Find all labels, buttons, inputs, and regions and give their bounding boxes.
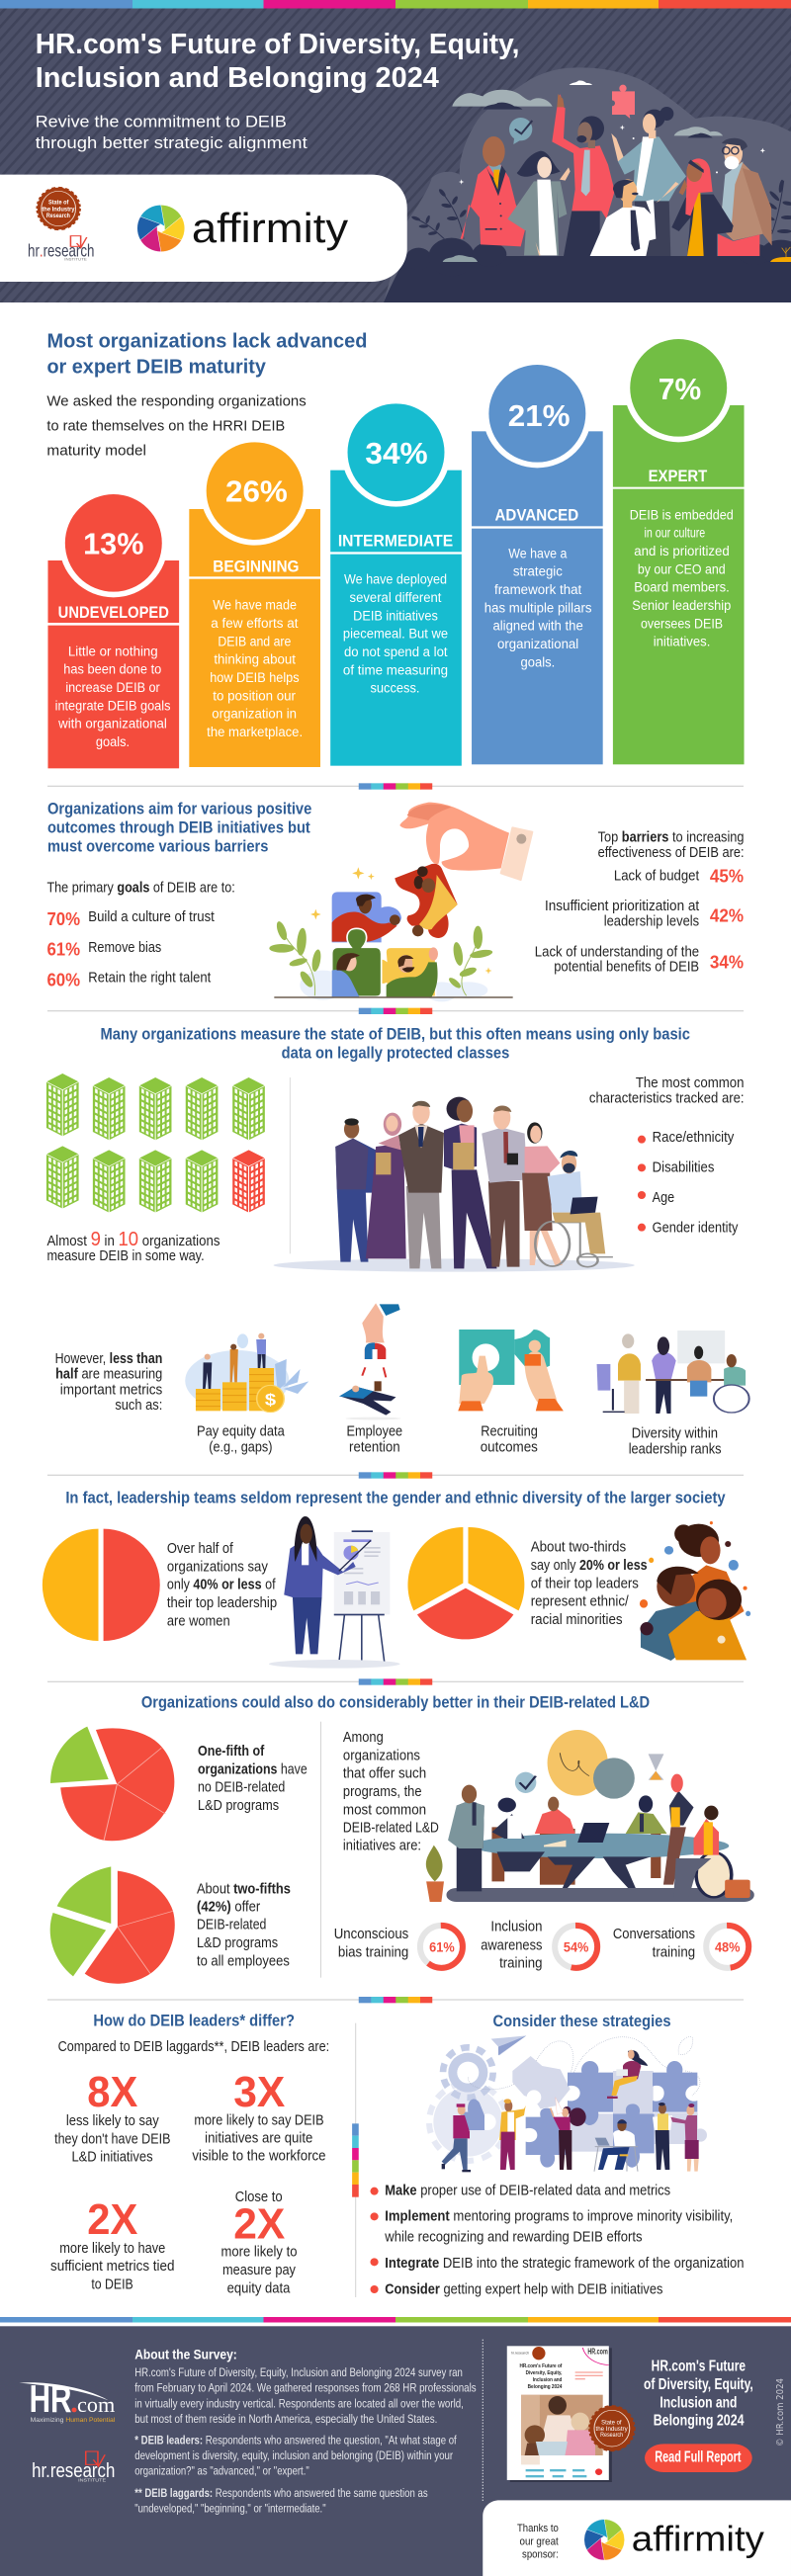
text: less than half: such as: — [115, 1397, 162, 1413]
column: advanced 21%: aligned with the — [492, 618, 583, 634]
text: among organizations: programs, the — [343, 1783, 422, 1799]
column: beginning 26%: thinking about — [214, 651, 296, 667]
stat: 3X: visible to the workforce — [192, 2148, 326, 2164]
text: one-fifth: L&D programs — [198, 1797, 279, 1813]
text: over half: organizations say — [167, 1559, 268, 1575]
text: about the survey: * DEIB leaders: Respondents who answered the question, "At what stage of — [134, 2434, 457, 2447]
stat: close to 2X pay equity: more likely to — [220, 2244, 298, 2260]
text: among organizations: Among — [343, 1729, 384, 1745]
stat: 8X — [54, 2068, 170, 2165]
subtitle: through better strategic alignment — [36, 133, 308, 152]
column: beginning 26%: to position our — [213, 688, 296, 703]
text: about two-thirds: represent ethnic/ — [531, 1593, 629, 1609]
donut chart: 61% unconscious bias training — [334, 1926, 463, 1968]
logo: HR.com: Maximizing Human Potential — [31, 2416, 115, 2424]
report cover: Belonging 2024 — [528, 2384, 562, 2390]
column: intermediate 34%: do not spend a lot — [344, 644, 448, 659]
stat: close to 2X pay equity: 2X — [233, 2199, 285, 2248]
text: over half: are women — [167, 1612, 230, 1628]
pie chart: women in top leadership — [43, 1529, 160, 1641]
text: among organizations: DEIB-related L&D — [343, 1819, 439, 1835]
label: diversity within leadership ranks — [629, 1425, 722, 1456]
report cover: HR.com's Future of — [520, 2363, 563, 2369]
intro text: We asked the responding organizations — [46, 393, 307, 409]
report cover: hr.research — [511, 2352, 529, 2356]
column: intermediate 34%: INTERMEDIATE — [338, 532, 453, 550]
icons: 9 in 10 buildings — [46, 1073, 265, 1213]
title: HR.com's Future of Diversity, Equity, — [36, 28, 520, 59]
text: two-fifths: (42%) offer — [197, 1899, 260, 1915]
panel: leaders and strategies — [47, 1997, 745, 2297]
column: intermediate 34% — [330, 398, 462, 766]
panel: sponsor — [483, 2500, 791, 2576]
stat: close to 2X pay equity — [220, 2189, 298, 2295]
stat: 2X metrics: 2X — [87, 2195, 137, 2243]
column: advanced 21% — [472, 359, 603, 764]
column: intermediate 34%: 34% — [365, 437, 428, 471]
panel: header — [0, 8, 791, 302]
logo: state of the industry research seal: the Industry — [42, 206, 75, 213]
list: primary goals: The primary goals of DEIB are to: — [46, 879, 235, 895]
column: expert 7%: in our culture — [645, 525, 705, 541]
text: about two-thirds — [531, 1539, 648, 1627]
text: about two-thirds: About two-thirds — [531, 1539, 626, 1555]
list: top barriers: leadership levels — [604, 913, 699, 929]
logo: state of the industry research seal: State of — [48, 199, 69, 206]
panel: sponsor: Thanks to — [517, 2523, 559, 2534]
column: beginning 26%: a few efforts at — [211, 616, 299, 631]
column: beginning 26%: BEGINNING — [213, 558, 300, 576]
logo: affirmity: affirmity — [192, 205, 349, 251]
illustration: woman presenting — [284, 1516, 390, 1663]
button: read full report — [645, 2444, 752, 2472]
text: one-fifth — [198, 1743, 308, 1813]
column: advanced 21%: We have a — [508, 546, 568, 560]
list: primary goals: Remove bias — [88, 939, 161, 955]
text: one-fifth: One-fifth of — [198, 1743, 265, 1759]
logo: hr.research: hr.research — [28, 240, 94, 260]
stat: close to 2X pay equity: equity data — [227, 2279, 291, 2295]
label: employee retention: Employee — [347, 1422, 402, 1438]
report cover: Diversity, Equity, — [526, 2370, 562, 2376]
stat: 2X metrics: sufficient metrics tied — [50, 2258, 175, 2274]
pie chart: two-fifths — [50, 1866, 175, 1984]
stat: close to 2X pay equity: Close to — [235, 2189, 283, 2204]
text: among organizations: initiatives are: — [343, 1838, 421, 1853]
report cover: HR.com — [587, 2348, 608, 2357]
report title — [644, 2359, 753, 2430]
intro text: to rate themselves on the HRRI DEIB — [46, 417, 285, 433]
column: intermediate 34%: piecemeal. But we — [343, 626, 448, 642]
column: beginning 26%: 26% — [225, 475, 288, 509]
column: undeveloped 13%: increase DEIB or — [65, 680, 160, 695]
text: about the survey: HR.com's Future of Diversity, Equity, Inclusion and Belonging 2024 survey ran — [134, 2366, 463, 2379]
column: beginning 26%: DEIB and are — [218, 634, 292, 648]
text: less than half: important metrics — [60, 1382, 162, 1398]
label: employee retention — [347, 1422, 402, 1454]
column: intermediate 34%: several different — [350, 590, 441, 605]
text: among organizations — [343, 1729, 439, 1853]
heading: how do DEIB leaders differ: How do DEIB leaders* differ? — [93, 2012, 295, 2029]
list: primary goals — [46, 879, 235, 990]
text: two-fifths — [197, 1880, 291, 1969]
panel: sponsor: our great — [520, 2535, 559, 2547]
heading: must overcome various barriers — [47, 837, 268, 855]
column: beginning 26%: We have made — [213, 597, 297, 613]
list: primary goals: 60% — [46, 970, 80, 990]
title: Inclusion and Belonging 2024 — [36, 61, 439, 93]
column: undeveloped 13%: 13% — [83, 528, 143, 561]
column: undeveloped 13% — [47, 488, 179, 768]
column: advanced 21%: organizational — [497, 637, 578, 651]
text: two-fifths: to all employees — [197, 1953, 290, 1969]
illustration: group of diverse people — [274, 1097, 635, 1272]
column: advanced 21%: ADVANCED — [495, 507, 578, 525]
stat: 8X: 8X — [87, 2068, 137, 2115]
list: top barriers: Insufficient prioritization at — [545, 898, 700, 913]
stat: 3X: initiatives are quite — [205, 2130, 312, 2146]
report cover: State of — [601, 2418, 622, 2426]
list: top barriers: Lack of budget — [614, 868, 700, 884]
text: two-fifths: About two-fifths — [197, 1880, 291, 1896]
text: one-fifth: no DEIB-related — [198, 1779, 285, 1795]
label: recruiting outcomes: outcomes — [481, 1438, 538, 1454]
column: beginning 26%: organization in — [212, 706, 297, 722]
heading: Organizations aim for various positive — [47, 800, 311, 817]
panel: logos — [0, 175, 407, 282]
stat: 8X: L&D initiatives — [71, 2149, 153, 2165]
label: diversity within leadership ranks: Diversity within — [632, 1425, 718, 1441]
text: about the survey: "undeveloped," "beginning," or "intermediate." — [134, 2503, 326, 2516]
panel: maturity section — [46, 329, 745, 768]
logo: hr.research institute: hr.research — [32, 2458, 115, 2482]
column: advanced 21%: goals. — [521, 654, 555, 669]
illustration: team around a table — [426, 1730, 754, 1902]
text: about the survey — [134, 2347, 477, 2516]
heading: data on legally protected classes — [282, 1044, 509, 1063]
stat text — [46, 1229, 220, 1263]
label: recruiting outcomes — [481, 1422, 538, 1454]
subtitle: Revive the commitment to DEIB — [36, 112, 287, 131]
report cover: the Industry — [596, 2425, 628, 2433]
donut chart: 48% conversations training: 48% — [715, 1939, 740, 1954]
subtitle — [36, 112, 308, 152]
stat: 3X: more likely to say DEIB — [194, 2111, 324, 2127]
donut chart: 54% inclusion awareness training: awareness — [481, 1936, 542, 1952]
report cover: Research — [600, 2431, 623, 2439]
text: about two-thirds: say only 20% or less — [531, 1557, 648, 1573]
donut chart: 48% conversations training: Conversations — [613, 1926, 695, 1941]
column: undeveloped 13%: has been done to — [63, 661, 161, 677]
text: among organizations: that offer such — [343, 1765, 426, 1781]
column: advanced 21%: framework that — [494, 582, 581, 597]
copyright: © HR.com 2024 — [775, 2378, 786, 2447]
stat: 2X metrics: more likely to have — [59, 2240, 165, 2256]
donut chart: 48% conversations training — [613, 1926, 748, 1968]
list: top barriers: 34% — [710, 952, 744, 973]
report cover: Inclusion and — [533, 2377, 562, 2383]
column: undeveloped 13%: Little or nothing — [68, 644, 158, 658]
text: about two-thirds: racial minorities — [531, 1611, 623, 1627]
logo: state of the industry research seal: Research — [46, 213, 70, 219]
column: expert 7% — [613, 333, 745, 764]
text: over half — [167, 1540, 277, 1628]
text: two-fifths: L&D programs — [197, 1934, 278, 1950]
panel: learning and development — [47, 1660, 754, 1984]
column: expert 7%: oversees DEIB — [641, 616, 723, 631]
logo: state of the industry research seal — [38, 188, 80, 229]
logo: hr.research — [28, 236, 94, 262]
panel: measuring DEIB — [46, 1008, 745, 1272]
text: about the survey: About the Survey: — [134, 2347, 237, 2362]
column: intermediate 34%: DEIB initiatives — [353, 608, 438, 623]
list: top barriers: 45% — [710, 866, 744, 887]
icon: pay equity data — [185, 1333, 308, 1413]
heading: Most organizations lack advanced — [46, 329, 367, 352]
text: over half: Over half of — [167, 1540, 233, 1556]
icon: pay equity data: $ — [265, 1391, 276, 1410]
donut chart: 61% unconscious bias training: bias training — [338, 1943, 408, 1959]
logo: affirmity — [131, 199, 349, 258]
column: expert 7%: EXPERT — [649, 468, 707, 485]
icon: recruiting outcomes puzzle — [458, 1330, 564, 1411]
intro text: Compared to DEIB laggards**, DEIB leaders are: — [58, 2038, 329, 2054]
text: less than half — [55, 1350, 162, 1413]
intro text: maturity model — [46, 442, 146, 458]
text: less than half: half are measuring — [55, 1366, 162, 1382]
bottom colour bar — [0, 2317, 791, 2323]
heading — [46, 329, 367, 378]
list: characteristics tracked: Race/ethnicity — [653, 1129, 735, 1145]
list: primary goals: Retain the right talent — [88, 970, 212, 986]
intro text — [46, 393, 307, 458]
label: diversity within leadership ranks: leadership ranks — [629, 1440, 722, 1456]
column: undeveloped 13%: with organizational — [57, 716, 167, 731]
list: primary goals: 61% — [46, 939, 80, 960]
list: strategies — [370, 2182, 745, 2296]
column: beginning 26%: how DEIB helps — [210, 670, 300, 685]
text: over half: only 40% or less of — [167, 1577, 276, 1592]
column: beginning 26%: the marketplace. — [207, 725, 303, 739]
text: one-fifth: organizations have — [198, 1760, 308, 1776]
donut chart: 54% inclusion awareness training: training — [499, 1955, 542, 1971]
text: two-fifths: DEIB-related — [197, 1917, 266, 1932]
donut chart: 54% inclusion awareness training: Inclusion — [490, 1919, 542, 1934]
stat: 8X: less likely to say — [66, 2112, 159, 2128]
text: about the survey: from February to April 2024. We gathered responses from 268 HR professionals — [134, 2382, 477, 2395]
column: advanced 21%: 21% — [508, 399, 571, 433]
column: expert 7%: 7% — [659, 373, 701, 406]
donut chart: 61% unconscious bias training: Unconscious — [334, 1926, 408, 1941]
list: top barriers: 42% — [710, 905, 744, 926]
donut chart: 61% unconscious bias training: 61% — [429, 1939, 455, 1954]
illustration: hand placing puzzle pieces — [269, 803, 532, 1001]
illustration: diverse team — [384, 67, 791, 302]
column: expert 7%: initiatives. — [654, 634, 710, 649]
panel: footer — [0, 2326, 791, 2576]
column: beginning 26% — [189, 437, 320, 767]
text: over half: their top leadership — [167, 1594, 277, 1610]
column: expert 7%: by our CEO and — [638, 561, 726, 576]
column: intermediate 34%: We have deployed — [344, 571, 447, 587]
label: pay equity data — [197, 1422, 285, 1454]
column: intermediate 34%: success. — [370, 680, 419, 696]
list: characteristics tracked — [589, 1074, 745, 1235]
stat text: measure DEIB in some way. — [46, 1247, 205, 1263]
stat: 3X — [192, 2068, 326, 2164]
label: recruiting outcomes: Recruiting — [481, 1422, 538, 1438]
text: about two-thirds: of their top leaders — [531, 1575, 639, 1590]
stat: 2X metrics: to DEIB — [91, 2275, 133, 2291]
heading: or expert DEIB maturity — [46, 355, 266, 378]
logo: HR.com: HR — [30, 2376, 71, 2421]
logo: HR.com: com — [77, 2393, 115, 2417]
logo: hr.research: INSTITUTE — [64, 258, 87, 262]
column: expert 7%: Senior leadership — [632, 598, 731, 613]
logo: hr.research institute: INSTITUTE — [78, 2479, 106, 2483]
title — [36, 28, 520, 93]
label: pay equity data: Pay equity data — [197, 1422, 285, 1438]
donut chart: 48% conversations training: training — [653, 1943, 695, 1959]
column: intermediate 34%: of time measuring — [343, 662, 448, 677]
heading: outcomes through DEIB initiatives but — [47, 818, 310, 836]
list: primary goals: Build a culture of trust — [88, 908, 215, 924]
column: advanced 21%: has multiple pillars — [484, 600, 592, 615]
icon: diversity within leadership — [597, 1331, 749, 1414]
stat: close to 2X pay equity: measure pay — [222, 2262, 296, 2277]
stat text: Almost 9 in 10 organizations — [46, 1229, 220, 1250]
column: undeveloped 13%: integrate DEIB goals — [55, 698, 171, 713]
text: about the survey: but most of them reside in North America, especially the United States. — [134, 2413, 437, 2426]
pie chart: ethnic and racial minorities — [407, 1527, 524, 1639]
list: characteristics tracked: Age — [653, 1189, 674, 1205]
logo: hr.research institute — [32, 2451, 115, 2483]
column: undeveloped 13%: goals. — [96, 734, 130, 749]
text: among organizations: most common — [343, 1801, 426, 1817]
panel: goals and barriers — [46, 783, 745, 1001]
donut chart: 54% inclusion awareness training — [481, 1919, 597, 1971]
text: about the survey: in virtually every industry vertical. Respondents are located all over the world, — [134, 2397, 464, 2410]
stat: 2X metrics — [50, 2195, 175, 2291]
heading — [47, 800, 311, 855]
text: about the survey: ** DEIB laggards: Respondents who answered the same question as — [134, 2487, 428, 2500]
list: top barriers — [535, 829, 745, 975]
panel: metrics and leadership diversity — [43, 1303, 750, 1663]
column: advanced 21%: strategic — [513, 563, 563, 579]
column: undeveloped 13%: UNDEVELOPED — [58, 604, 169, 622]
text: less than half: However, less than — [55, 1350, 162, 1366]
text: about the survey: organization?" as "advanced," or "expert." — [134, 2465, 309, 2478]
stat: 8X: they don't have DEIB — [54, 2130, 170, 2146]
panel: sponsor: sponsor: — [522, 2548, 559, 2561]
text: about the survey: development is diversity, equity, inclusion and belonging (DEIB) within your — [134, 2449, 453, 2462]
illustration: faces of diverse women and men — [640, 1521, 750, 1661]
report cover — [507, 2346, 634, 2482]
column: expert 7%: and is prioritized — [634, 544, 730, 558]
top colour bar — [0, 0, 791, 8]
donut chart: 54% inclusion awareness training: 54% — [564, 1939, 588, 1954]
stat: 3X: 3X — [233, 2068, 285, 2115]
illustration: people building puzzle and gears — [429, 2035, 707, 2172]
pie chart: one-fifth — [50, 1727, 174, 1841]
icon: employee retention magnet — [339, 1303, 401, 1419]
text: among organizations: organizations — [343, 1747, 420, 1762]
list: primary goals: 70% — [46, 909, 80, 930]
label: pay equity data: (e.g., gaps) — [209, 1438, 273, 1454]
list: characteristics tracked: Disabilities — [653, 1159, 714, 1175]
label: employee retention: retention — [349, 1438, 400, 1454]
heading — [101, 1025, 690, 1063]
column: expert 7%: Board members. — [634, 579, 730, 595]
